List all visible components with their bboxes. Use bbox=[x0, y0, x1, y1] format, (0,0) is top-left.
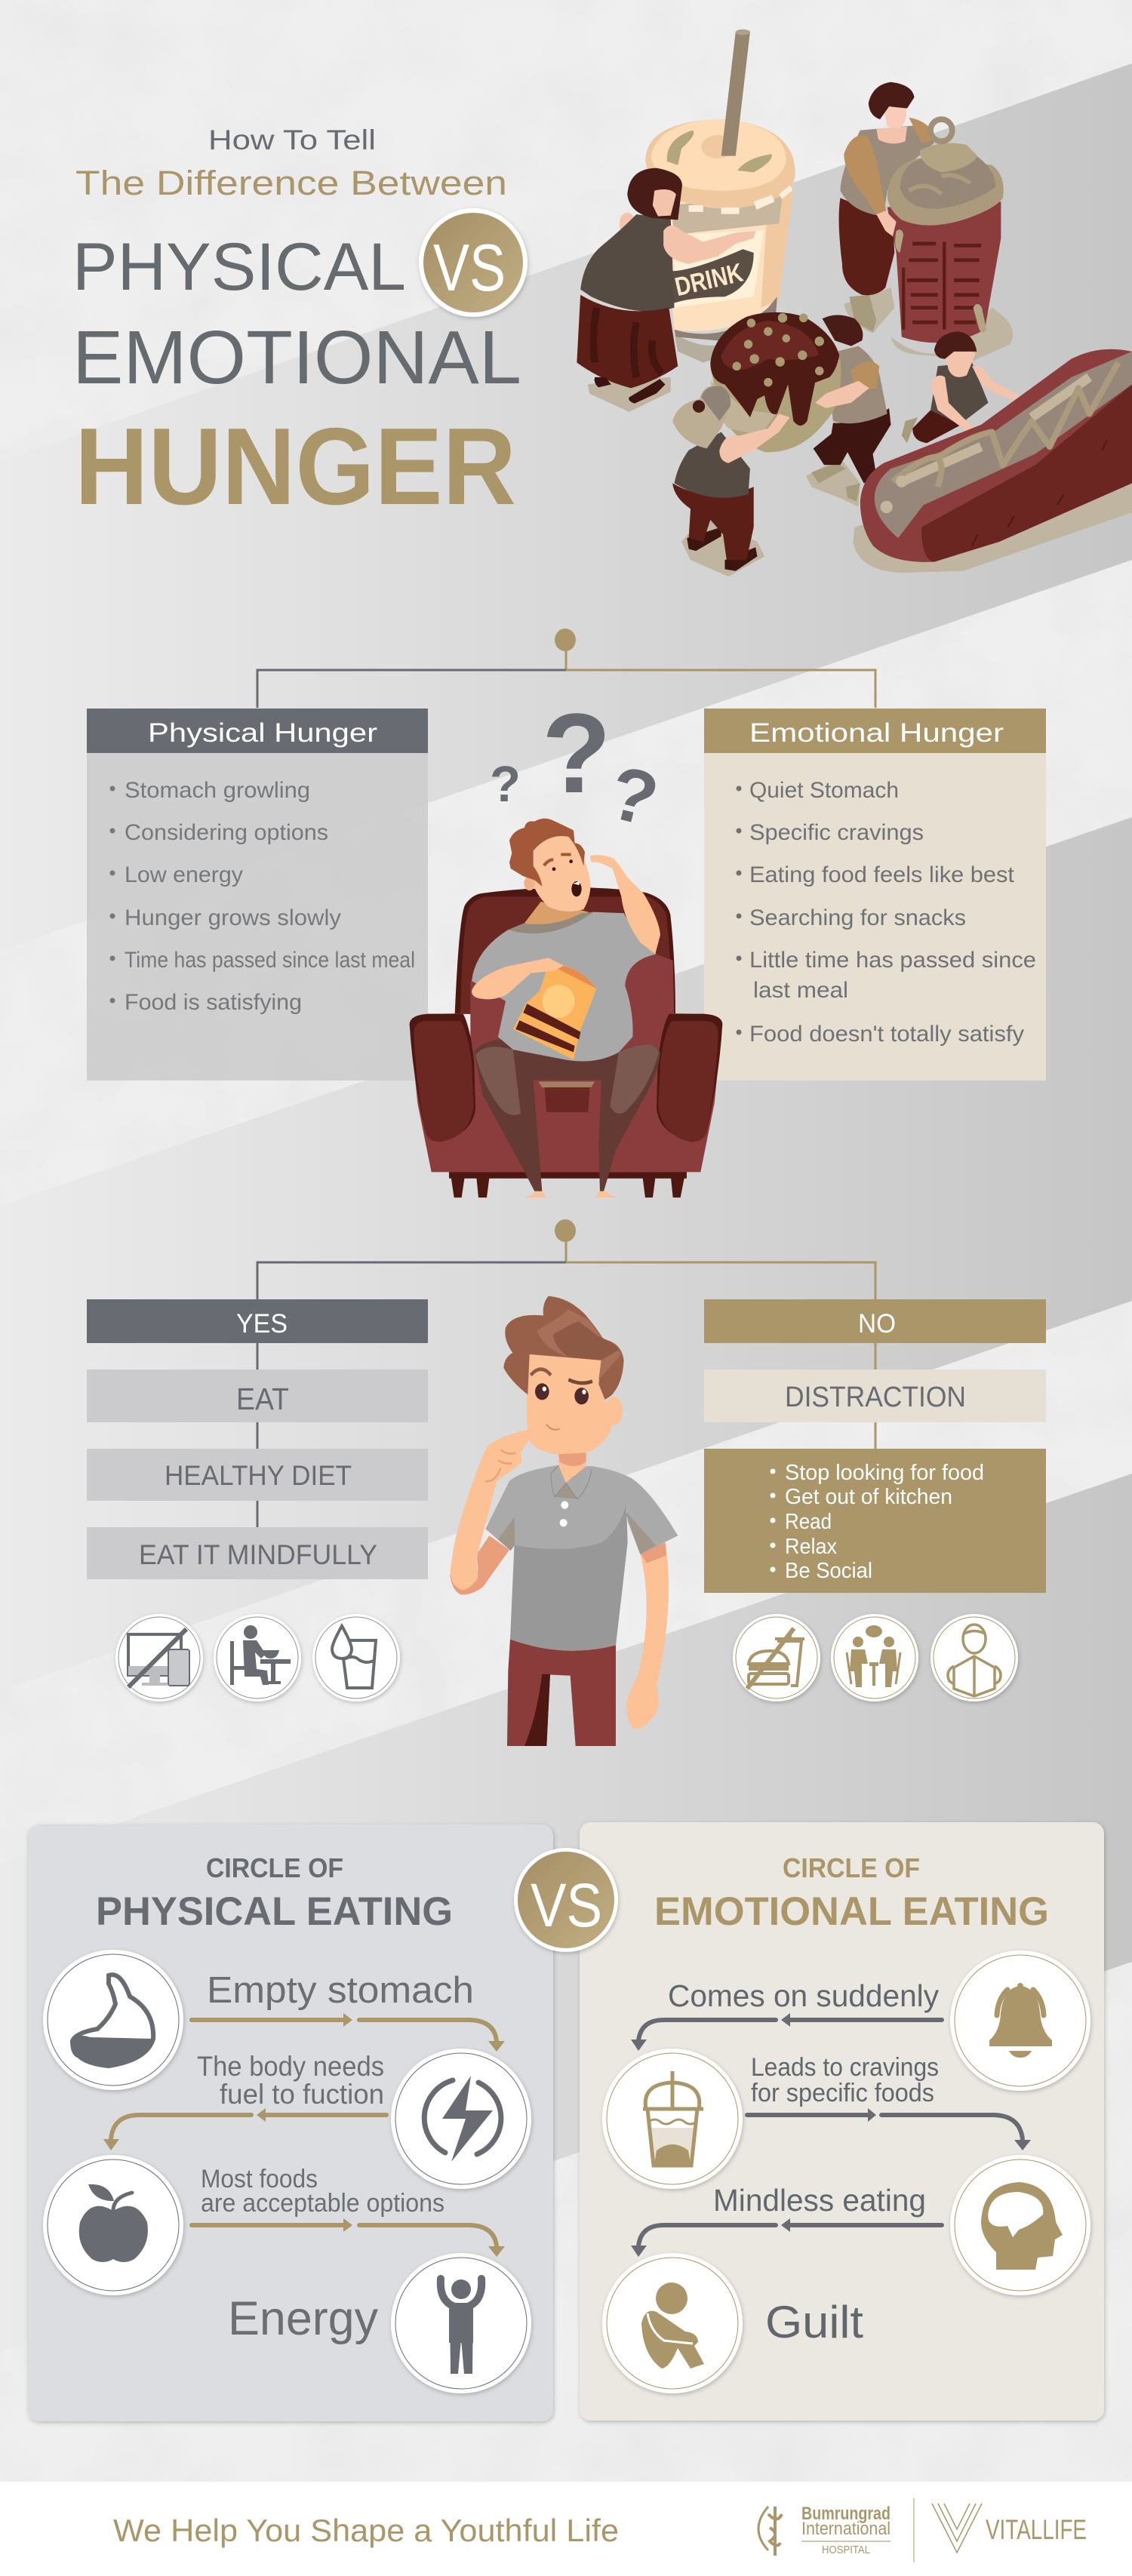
ground shadows bbox=[588, 287, 1132, 576]
step: leads to cravings bbox=[751, 2053, 939, 2107]
healthy diet box bbox=[87, 1449, 428, 1501]
title bbox=[72, 124, 521, 527]
panel: emotional hunger bbox=[704, 709, 1046, 1081]
distraction list: Read bbox=[785, 1510, 832, 1534]
icon: empty stomach bbox=[43, 1950, 183, 2090]
eat box: EAT bbox=[236, 1382, 289, 1416]
title: HUNGER bbox=[75, 405, 516, 527]
list: emotional hunger signs bbox=[737, 778, 1036, 1047]
logo: bumrungrad: HOSPITAL bbox=[822, 2544, 870, 2556]
step: leads to cravings: Leads to cravings bbox=[751, 2053, 939, 2082]
panel: yes path bbox=[87, 1299, 428, 1579]
list: physical hunger signs: Time has passed since last meal bbox=[125, 948, 415, 973]
icon: social conversation bbox=[831, 1614, 918, 1701]
flow connector 1 bbox=[257, 629, 875, 708]
yes box: YES bbox=[236, 1309, 288, 1339]
distraction list: Stop looking for food bbox=[785, 1461, 984, 1485]
illustration: tiny people with giant food bbox=[577, 29, 1132, 576]
icon: glass of water bbox=[312, 1614, 400, 1701]
panel: physical hunger bbox=[87, 709, 428, 1081]
heading: emotional hunger bbox=[704, 709, 1046, 753]
heading: physical hunger bbox=[87, 709, 428, 753]
step: body needs fuel: fuel to fuction bbox=[220, 2079, 384, 2110]
heading: emotional eating: EMOTIONAL EATING bbox=[654, 1889, 1049, 1934]
icon: apple bbox=[43, 2155, 183, 2295]
small person on hot dog bbox=[902, 331, 1019, 443]
logo: vitallife: VITALLIFE bbox=[986, 2514, 1087, 2545]
illustration: thinking man bbox=[450, 1296, 678, 1746]
arrow: fuel to food bbox=[103, 2108, 386, 2150]
tagline: We Help You Shape a Youthful Life bbox=[113, 2513, 619, 2548]
logo: bumrungrad bbox=[758, 2504, 891, 2556]
man eating chips bbox=[472, 819, 660, 1197]
healthy diet box: HEALTHY DIET bbox=[165, 1460, 352, 1491]
heading: emotional hunger: Emotional Hunger bbox=[749, 718, 1004, 748]
person behind doughnut bbox=[811, 315, 891, 502]
drink cup: DRINK bbox=[672, 258, 746, 302]
step: energy: Energy bbox=[228, 2292, 378, 2345]
vs badge bbox=[514, 1848, 618, 1952]
list: physical hunger signs bbox=[110, 778, 415, 1015]
list: physical hunger signs: Stomach growling bbox=[125, 778, 310, 803]
icon: guilty person bbox=[602, 2253, 743, 2393]
question marks: ? bbox=[601, 750, 666, 843]
no box: NO bbox=[858, 1309, 896, 1339]
vs badge: VS bbox=[531, 1871, 602, 1940]
heading: emotional eating bbox=[654, 1852, 1049, 1934]
step: comes on suddenly: Comes on suddenly bbox=[668, 1978, 939, 2013]
heading: emotional eating: CIRCLE OF bbox=[783, 1852, 920, 1883]
question marks: ? bbox=[542, 690, 611, 816]
heading: physical eating: PHYSICAL EATING bbox=[96, 1889, 453, 1934]
title: How To Tell bbox=[208, 124, 376, 155]
drink cup bbox=[645, 29, 795, 340]
doughnut bbox=[710, 312, 841, 452]
man with ice cream bbox=[839, 82, 1004, 343]
illustration: man in armchair eating chips bbox=[410, 819, 722, 1197]
yes box bbox=[87, 1299, 428, 1343]
icon: energetic person bbox=[391, 2253, 531, 2393]
step: empty stomach: Empty stomach bbox=[207, 1970, 474, 2011]
heading: physical eating: CIRCLE OF bbox=[206, 1852, 343, 1883]
panel: circle of emotional eating bbox=[580, 1822, 1104, 2421]
step: guilt: Guilt bbox=[765, 2297, 863, 2347]
vs badge: VS bbox=[433, 230, 506, 305]
arrow: bell to cup bbox=[631, 2013, 942, 2051]
step: leads to cravings: for specific foods bbox=[751, 2079, 934, 2107]
woman hugging cup bbox=[577, 168, 755, 404]
list: emotional hunger signs: last meal bbox=[753, 978, 848, 1003]
icon: eating at table bbox=[214, 1614, 301, 1701]
eat it mindfully box: EAT IT MINDFULLY bbox=[139, 1539, 377, 1570]
heading: physical eating bbox=[96, 1852, 453, 1934]
panel: circle of physical eating bbox=[28, 1824, 553, 2421]
eat box bbox=[87, 1369, 428, 1422]
distraction list: Be Social bbox=[785, 1559, 872, 1583]
hot dog bbox=[860, 349, 1132, 562]
logo: bumrungrad: International bbox=[801, 2519, 891, 2539]
list: emotional hunger signs: Food doesn't totally satisfy bbox=[749, 1022, 1024, 1047]
icon: brain in head bbox=[950, 2155, 1090, 2295]
no box bbox=[704, 1299, 1046, 1343]
step: body needs fuel bbox=[197, 2051, 384, 2110]
vs badge bbox=[419, 208, 528, 317]
distraction box bbox=[704, 1369, 1046, 1422]
list: emotional hunger signs: Searching for snacks bbox=[749, 905, 966, 930]
title: PHYSICAL bbox=[72, 229, 406, 304]
list: emotional hunger signs: Eating food feels like best bbox=[749, 862, 1015, 887]
step: most foods: are acceptable options bbox=[201, 2189, 444, 2218]
list: physical hunger signs: Considering options bbox=[125, 820, 328, 845]
arrow: brain to guilt bbox=[631, 2218, 942, 2257]
armchair bbox=[410, 887, 722, 1197]
distraction list: Relax bbox=[785, 1535, 837, 1559]
icon: reading bbox=[931, 1614, 1018, 1701]
list: physical hunger signs: Hunger grows slowly bbox=[125, 905, 341, 930]
grey-haired person carrying doughnut bbox=[672, 381, 869, 571]
list: emotional hunger signs: Little time has passed since bbox=[749, 948, 1036, 973]
footer bbox=[0, 2482, 1132, 2576]
arrow: food to energy bbox=[192, 2218, 505, 2257]
list: physical hunger signs: Low energy bbox=[125, 862, 243, 887]
list: emotional hunger signs: Quiet Stomach bbox=[749, 778, 899, 803]
list: emotional hunger signs: Specific cravings bbox=[749, 820, 924, 845]
title: EMOTIONAL bbox=[72, 315, 521, 400]
question marks: ? bbox=[490, 756, 521, 813]
step: mindless eating: Mindless eating bbox=[713, 2183, 926, 2218]
flow connector 2 bbox=[257, 1219, 875, 1593]
arrow: cup to brain bbox=[747, 2108, 1031, 2150]
distraction list bbox=[704, 1449, 1046, 1593]
icon: bell bbox=[950, 1950, 1090, 2091]
logo: bumrungrad: Bumrungrad bbox=[801, 2504, 891, 2524]
step: most foods: Most foods bbox=[201, 2165, 318, 2193]
step: most foods bbox=[201, 2165, 444, 2218]
icon: bubble tea bbox=[602, 2049, 743, 2189]
list: physical hunger signs: Food is satisfying bbox=[125, 990, 302, 1015]
panel: no path bbox=[704, 1299, 1046, 1593]
arrow: stomach to fuel bbox=[192, 2013, 505, 2052]
icon: no screens bbox=[115, 1614, 203, 1701]
distraction list: Get out of kitchen bbox=[785, 1485, 952, 1509]
logo: vitallife bbox=[932, 2504, 1087, 2553]
icon: lightning bolt bbox=[391, 2049, 531, 2189]
title: The Difference Between bbox=[75, 164, 507, 202]
eat it mindfully box bbox=[87, 1527, 428, 1579]
heading: physical hunger: Physical Hunger bbox=[148, 718, 377, 748]
question marks bbox=[490, 690, 666, 843]
distraction box: DISTRACTION bbox=[785, 1382, 966, 1413]
step: body needs fuel: The body needs bbox=[197, 2051, 384, 2082]
icon: no fast food bbox=[733, 1614, 820, 1701]
